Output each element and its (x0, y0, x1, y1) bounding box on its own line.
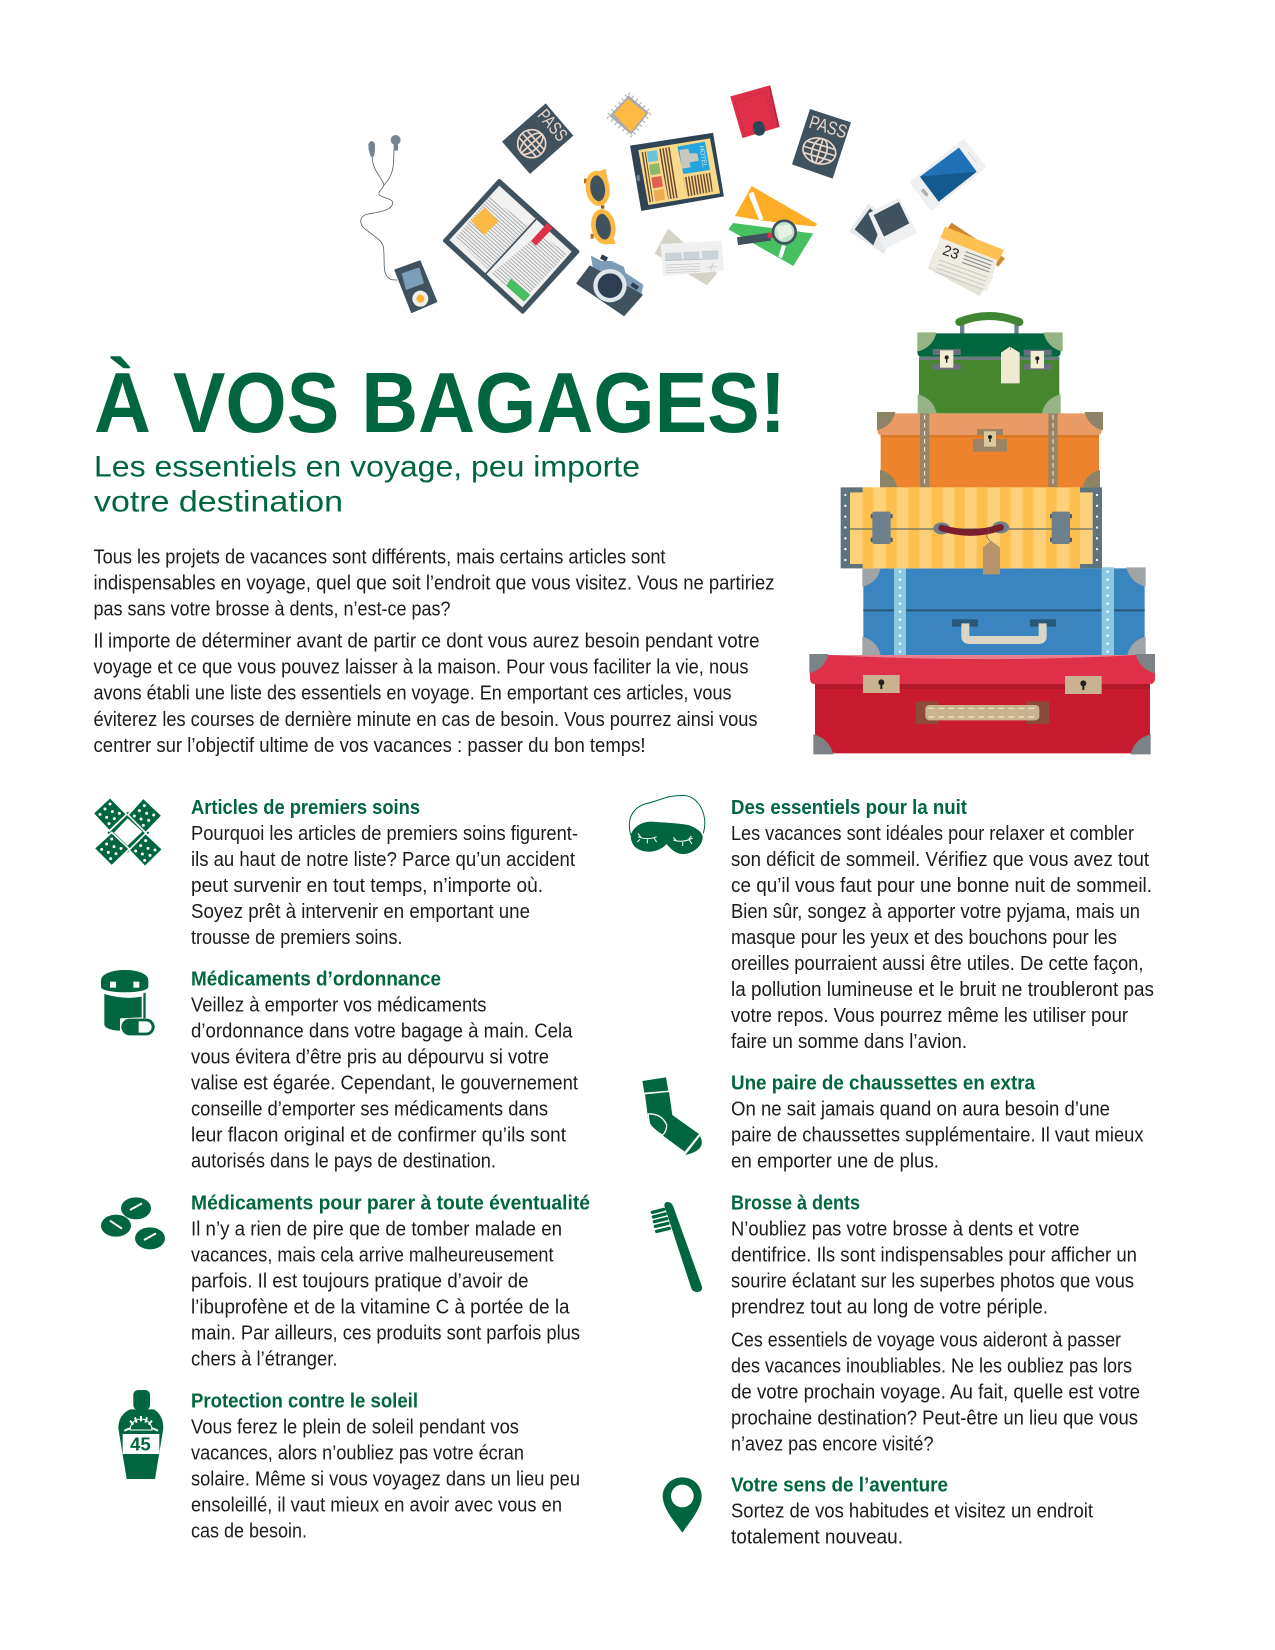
panel: toothbrush: sourire éclatant sur les superbes photos que vous (731, 1270, 1134, 1292)
panel: medication just in case: vacances, mais cela arrive malheureusement (191, 1245, 554, 1267)
panel: sense of adventure (663, 1475, 1093, 1549)
panel: prescriptions: leur flacon original et de confirmer qu’ils sont (191, 1124, 566, 1146)
icon: calendar (928, 223, 1005, 296)
heading: adventure: Votre sens de l’aventure (731, 1475, 948, 1497)
panel: medication just in case: main. Par ailleurs, ces produits sont parfois plus (191, 1323, 580, 1345)
panel: medication just in case: chers à l’étranger. (191, 1349, 338, 1371)
icon: bandages (93, 797, 163, 867)
intro text: voyage et ce que vous pouvez laisser à la maison. Pour vous faciliter la vie, nous (94, 656, 748, 678)
panel: night essentials: Bien sûr, songez à apporter votre pyjama, mais un (731, 901, 1140, 923)
panel: night essentials: son déficit de sommeil. Vérifiez que vous avez tout (731, 849, 1149, 871)
icon: open notebook (445, 181, 577, 312)
closing text: prochaine destination? Peut-être un lieu que vous (731, 1408, 1138, 1430)
panel: socks: en emporter une de plus. (731, 1151, 939, 1173)
icon: passport left: PASS (534, 105, 571, 145)
icon: plane tickets (656, 230, 723, 284)
panel: first aid: ils au haut de notre liste? Parce qu’un accident (191, 849, 575, 871)
panel: first aid: peut survenir en tout temps, n’importe où. (191, 875, 543, 897)
panel: medication just in case: Il n’y a rien de pire que de tomber malade en (191, 1219, 562, 1241)
intro text: Tous les projets de vacances sont différents, mais certains articles sont (94, 546, 666, 568)
green suitcase (917, 316, 1063, 413)
subtitle: votre destination (94, 486, 343, 518)
panel: socks: On ne sait jamais quand on aura besoin d’une (731, 1099, 1110, 1121)
panel: prescriptions: Veillez à emporter vos médicaments (191, 994, 486, 1016)
icon: passport left (502, 103, 573, 174)
panel: sun protection: ensoleillé, il vaut mieux en avoir avec vous en (191, 1495, 562, 1517)
panel: sense of adventure: totalement nouveau. (731, 1527, 903, 1549)
panel: sun protection (118, 1390, 580, 1543)
illustration: travel items (361, 86, 1005, 315)
heading: prescriptions: Médicaments d’ordonnance (191, 968, 441, 990)
blue suitcase (862, 567, 1146, 656)
intro text: centrer sur l’objectif ultime de vos vacances : passer du bon temps! (94, 735, 646, 757)
panel: medication just in case: l’ibuprofène et de la vitamine C à portée de la (191, 1297, 570, 1319)
icon: map pin (663, 1477, 702, 1533)
subtitle (94, 450, 640, 518)
panel: sense of adventure: Sortez de vos habitudes et visitez un endroit (731, 1501, 1093, 1523)
icon: envelope and map with magnifier (728, 186, 817, 266)
panel: socks: paire de chaussettes supplémentaire. Il vaut mieux (731, 1125, 1144, 1147)
panel: first aid (93, 797, 578, 949)
closing text: n’avez pas encore visité? (731, 1434, 934, 1456)
icon: sunglasses (584, 169, 616, 244)
heading: toothbrush: Brosse à dents (731, 1192, 860, 1214)
heading: sun protection: Protection contre le soleil (191, 1391, 418, 1413)
icon: toothbrush (652, 1202, 702, 1292)
icon: tablet with hotel page: HOTEL (697, 145, 708, 168)
title: À VOS BAGAGES! (94, 356, 786, 451)
panel: prescriptions: conseille d’emporter ses médicaments dans (191, 1098, 548, 1120)
icon: smartphone (912, 141, 984, 209)
panel: toothbrush: prendrez tout au long de votre périple. (731, 1296, 1048, 1318)
panel: sun protection: cas de besoin. (191, 1521, 307, 1543)
panel: night essentials: Les vacances sont idéales pour relaxer et combler (731, 823, 1134, 845)
intro text: pas sans votre brosse à dents, n’est-ce pas? (94, 598, 450, 620)
icon: tablets (101, 1197, 165, 1249)
red suitcase (809, 654, 1155, 754)
closing text (731, 1330, 1140, 1456)
icon: sock (642, 1077, 702, 1155)
panel: first aid: trousse de premiers soins. (191, 927, 402, 949)
panel: prescriptions: autorisés dans le pays de destination. (191, 1150, 496, 1172)
icon: passport right: PASS (807, 111, 850, 142)
panel: night essentials: votre repos. Vous pourrez même les utiliser pour (731, 1005, 1128, 1027)
panel: night essentials: oreilles pourraient aussi être utiles. De cette façon, (731, 953, 1144, 975)
intro text: Il importe de déterminer avant de partir ce dont vous aurez besoin pendant votre (94, 630, 760, 652)
panel: sun protection: solaire. Même si vous voyagez dans un lieu peu (191, 1469, 580, 1491)
panel: night essentials: masque pour les yeux et des bouchons pour les (731, 927, 1117, 949)
heading: night essentials: Des essentiels pour la nuit (731, 797, 967, 819)
panel: night essentials: ce qu’il vous faut pour une bonne nuit de sommeil. (731, 875, 1152, 897)
panel: toothbrush: N’oubliez pas votre brosse à dents et votre (731, 1218, 1080, 1240)
icon: sleep mask (629, 795, 705, 854)
icon: wallet (731, 86, 779, 138)
icon: calendar: 23 (940, 243, 961, 263)
heading: medication: Médicaments pour parer à toute éventualité (191, 1193, 590, 1215)
icon: sunscreen bottle (118, 1390, 163, 1479)
icon: earphones and music player (361, 135, 437, 312)
icon: photo prints (849, 197, 917, 254)
panel: prescriptions (101, 968, 578, 1172)
panel: prescriptions: d’ordonnance dans votre bagage à main. Cela (191, 1020, 573, 1042)
intro text: éviterez les courses de dernière minute en cas de besoin. Vous pourrez ainsi vous (94, 709, 758, 731)
closing text: Ces essentiels de voyage vous aideront à passer (731, 1330, 1121, 1352)
panel: prescriptions: valise est égarée. Cependant, le gouvernement (191, 1072, 578, 1094)
illustration: stack of suitcases (809, 316, 1155, 754)
panel: medication just in case: parfois. Il est toujours pratique d’avoir de (191, 1271, 528, 1293)
closing text: des vacances inoubliables. Ne les oubliez pas lors (731, 1356, 1132, 1378)
intro text: avons établi une liste des essentiels en voyage. En emportant ces articles, vous (94, 682, 732, 704)
panel: prescriptions: vous évitera d’être pris au dépourvu si votre (191, 1046, 549, 1068)
closing text: de votre prochain voyage. Au fait, quelle est votre (731, 1382, 1140, 1404)
orange suitcase (877, 412, 1103, 488)
panel: toothbrush (652, 1192, 1137, 1318)
subtitle: Les essentiels en voyage, peu importe (94, 450, 640, 484)
panel: sun protection: vacances, alors n’oubliez pas votre écran (191, 1443, 524, 1465)
panel: night essentials (629, 795, 1154, 1053)
panel: night essentials: faire un somme dans l’avion. (731, 1031, 967, 1053)
icon: pill bottle (101, 970, 155, 1035)
panel: first aid: Soyez prêt à intervenir en emportant une (191, 901, 530, 923)
icon: camera (577, 254, 643, 315)
panel: sun protection: Vous ferez le plein de soleil pendant vos (191, 1417, 519, 1439)
icon: passport right (792, 109, 851, 179)
heading: socks: Une paire de chaussettes en extra (731, 1073, 1036, 1095)
panel: socks (642, 1073, 1144, 1173)
icon: tablet with hotel page (631, 133, 723, 210)
yellow suitcase (841, 487, 1102, 574)
panel: toothbrush: dentifrice. Ils sont indispensables pour afficher un (731, 1244, 1137, 1266)
panel: first aid: Pourquoi les articles de premiers soins figurent- (191, 823, 578, 845)
panel: medication just in case (101, 1193, 590, 1371)
icon: stamp (607, 93, 651, 137)
intro text (94, 546, 774, 757)
intro text: indispensables en voyage, quel que soit l’endroit que vous visitez. Vous ne partiriez (94, 572, 774, 594)
icon: sunscreen bottle: 45 (130, 1434, 151, 1455)
panel: night essentials: la pollution lumineuse et le bruit ne troubleront pas (731, 979, 1154, 1001)
heading: first aid: Articles de premiers soins (191, 797, 420, 819)
